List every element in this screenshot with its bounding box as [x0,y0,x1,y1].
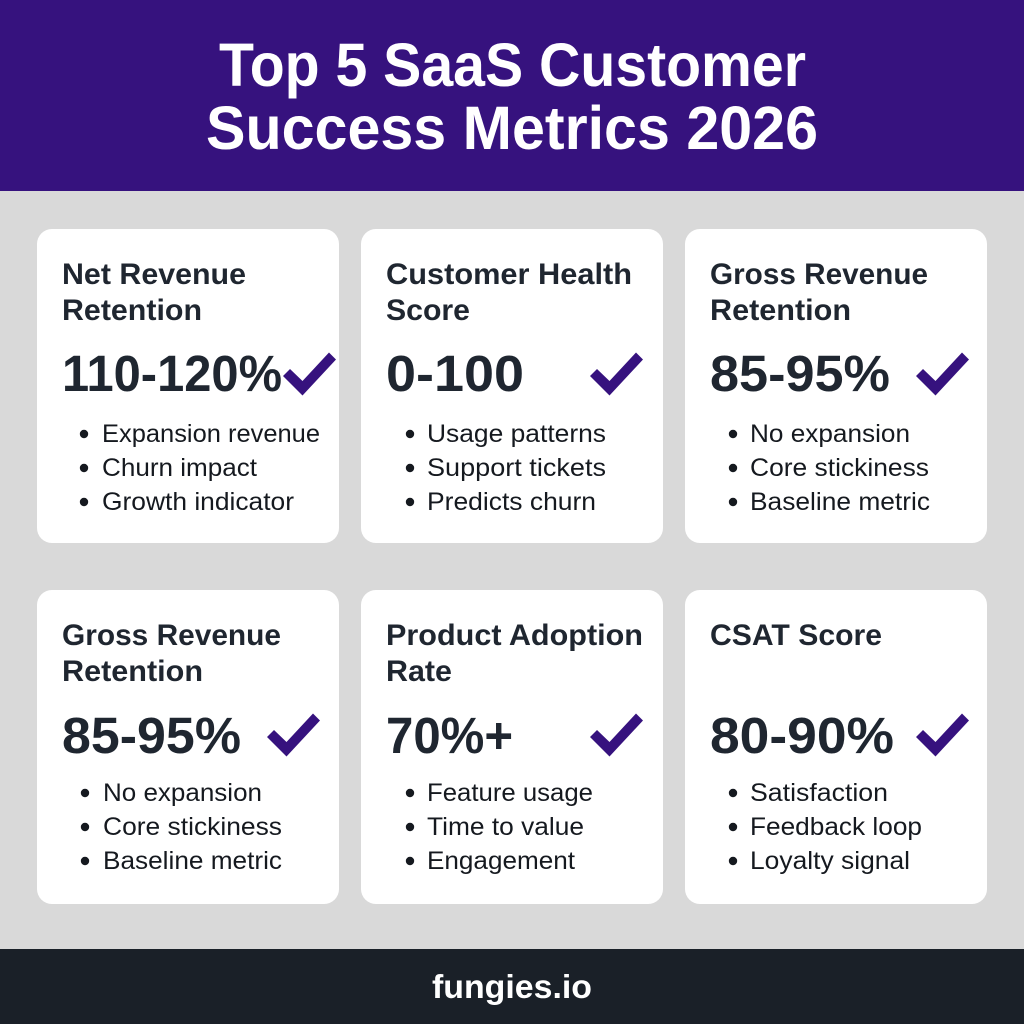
bullet list: Feedback loop [750,813,922,841]
heading: Gross Revenue Retention [710,258,928,327]
bullet list: Loyalty signal [750,847,910,875]
panel: Gross Revenue Retention (second) [37,590,339,904]
icon: check mark [283,352,336,396]
heading: Product Adoption Rate: Rate [386,655,452,688]
bullet list [81,779,282,875]
bullet list: Growth indicator [102,488,294,516]
bullet list [729,420,930,516]
heading: Gross Revenue Retention: Gross Revenue [710,258,928,291]
panel: CSAT Score [685,590,987,904]
heading: Net Revenue Retention: Net Revenue [62,258,246,291]
value: 110-120%: 110-120% [62,345,282,402]
bullet list: No expansion [750,420,910,448]
header band [0,0,1024,191]
heading: Gross Revenue Retention: Retention [62,655,203,688]
heading: Net Revenue Retention: Retention [62,294,202,327]
bullet list: Support tickets [427,454,606,482]
bullet list: Baseline metric [750,488,930,516]
bullet list [80,420,320,516]
bullet list: Time to value [427,813,584,841]
value: 85-95%: 85-95% [62,707,241,764]
bullet list: Usage patterns [427,420,606,448]
title [206,31,818,162]
heading: Gross Revenue Retention: Retention [710,294,851,327]
bullet list: Expansion revenue [102,420,320,448]
bullet list: Satisfaction [750,779,888,807]
heading: Gross Revenue Retention: Gross Revenue [62,619,281,652]
bullet list: Baseline metric [103,847,282,875]
panel: Gross Revenue Retention [685,229,987,543]
bullet list: Engagement [427,847,575,875]
footer text: fungies.io: fungies.io [432,968,592,1005]
value: 80-90%: 80-90% [710,707,894,764]
bullet list: Feature usage [427,779,593,807]
bullet list: Churn impact [102,454,257,482]
heading: Customer Health Score [386,258,632,327]
bullet list: Core stickiness [103,813,282,841]
title: Top 5 SaaS Customer [219,31,806,99]
bullet list: Core stickiness [750,454,929,482]
icon: check mark [590,352,643,396]
heading: Customer Health Score: Customer Health [386,258,632,291]
panel: Product Adoption Rate [361,590,663,904]
panel: Net Revenue Retention [37,229,339,543]
heading: CSAT Score: CSAT Score [710,619,882,652]
heading: Product Adoption Rate: Product Adoption [386,619,643,652]
value: 70%+: 70%+ [386,707,513,764]
bullet list [406,779,593,875]
icon: check mark [267,714,320,756]
value: 0-100: 0-100 [386,345,524,402]
bullet list [729,779,922,875]
icon: check mark [590,714,643,756]
heading: Net Revenue Retention [62,258,246,327]
icon: check mark [916,352,969,396]
footer band [0,949,1024,1024]
heading: Product Adoption Rate [386,619,643,688]
heading: Customer Health Score: Score [386,294,470,327]
panel: Customer Health Score [361,229,663,543]
value: 85-95%: 85-95% [710,345,890,402]
bullet list [406,420,606,516]
title: Success Metrics 2026 [206,94,818,162]
icon: check mark [916,714,969,756]
heading: Gross Revenue Retention [62,619,281,688]
bullet list: No expansion [103,779,262,807]
bullet list: Predicts churn [427,488,596,516]
